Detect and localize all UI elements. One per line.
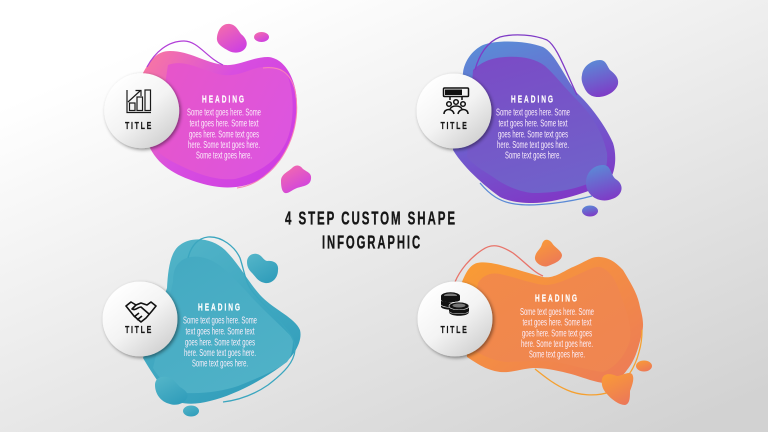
panel: step 3 teal [102,237,301,416]
pink title: TITLE [125,120,153,132]
pink text [187,94,261,162]
pink light outline curve [237,68,297,188]
orange outline top [455,246,543,282]
teal circle [102,282,178,356]
pink text: HEADING [202,94,246,106]
teal outline [188,237,295,402]
purple outline top [475,35,577,95]
purple outer blob [453,41,615,203]
panel: step 4 orange [418,240,652,405]
purple circle [416,74,492,148]
orange circle [418,282,492,356]
orange text [520,294,594,360]
purple inner blob [467,57,607,193]
pink text: Some text goes here. [196,150,252,162]
teal text: Some text goes here. [192,358,248,370]
pink inner blob [155,63,293,179]
icon: bar chart [127,90,151,112]
title: 4 STEP CUSTOM SHAPE [285,208,457,228]
orange text: HEADING [535,294,579,304]
purple blob lower [586,165,622,201]
purple text [496,94,570,162]
orange inner blob [467,267,630,372]
teal text: text goes here. Some text [186,326,255,338]
pink text: here. Some text goes here. [188,140,260,151]
orange text: goes here. Some text goes [522,328,592,340]
title [285,208,457,252]
teal text: here. Some text goes here. [184,348,256,359]
orange title: TITLE [440,324,468,336]
orange text: Some text goes here. Some [520,307,594,318]
icon: coins [441,292,469,316]
orange text: Some text goes here. [529,350,585,360]
purple text: goes here. Some text goes [498,130,568,140]
icon: meeting people [444,88,468,114]
teal outer blob [143,239,301,404]
teal text: HEADING [198,302,242,314]
pink blob small top [217,24,247,53]
teal text [183,302,257,370]
teal oval [183,406,199,416]
pink oval [254,32,269,42]
purple title: TITLE [440,120,468,132]
orange text: here. Some text goes here. [521,339,593,350]
orange outer blob [462,257,643,383]
orange text: text goes here. Some text [522,318,592,328]
teal text: Some text goes here. Some [183,316,257,326]
pink outline curve [147,41,223,67]
purple text: HEADING [511,94,555,106]
teal blob right [247,254,278,283]
orange blob top [535,240,562,266]
panel: step 2 purple [416,35,622,217]
orange oval [636,360,652,372]
teal blob lower [155,377,188,405]
pink text: text goes here. Some text [190,118,259,130]
orange blob lower [602,373,633,405]
teal title: TITLE [125,324,153,336]
teal text: goes here. Some text goes [185,338,255,348]
purple oval [582,206,598,216]
purple text: Some text goes here. Some [496,108,570,118]
title: INFOGRAPHIC [322,232,422,252]
panel: step 1 pink [104,24,311,193]
purple text: text goes here. Some text [498,118,568,130]
icon: handshake [126,302,156,322]
orange outline bottom [535,330,642,395]
purple blob right [582,60,618,97]
pink outer blob [143,51,297,187]
purple text: here. Some text goes here. [497,140,569,151]
purple text: Some text goes here. [505,150,561,162]
purple outline bottom [480,183,592,205]
pink text: Some text goes here. Some [187,108,261,118]
pink circle [104,73,179,148]
pink blob small bottom [281,165,311,193]
teal inner blob [153,257,293,393]
pink text: goes here. Some text goes [189,130,259,140]
